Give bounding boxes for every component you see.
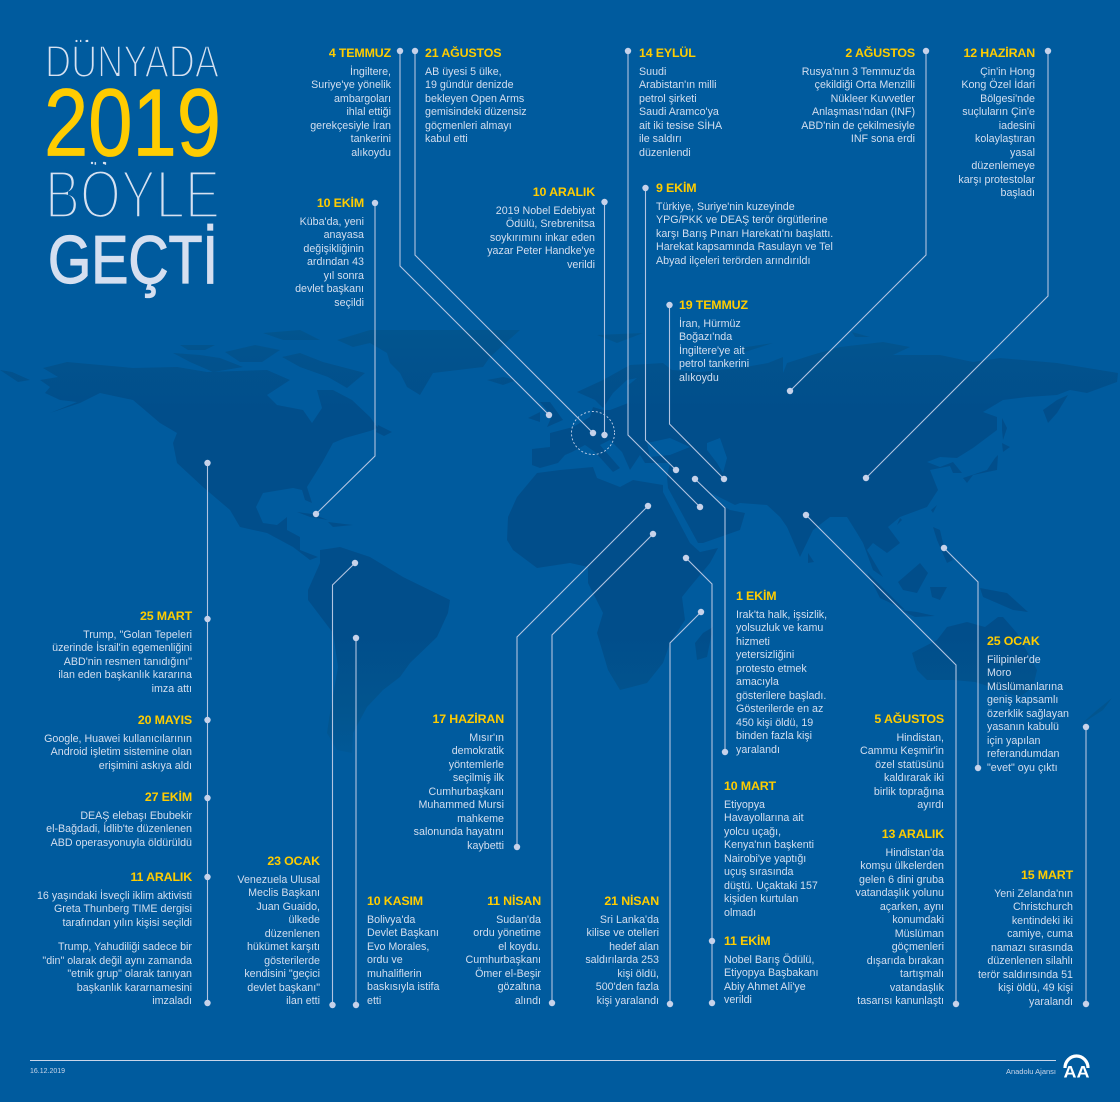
footer date: 16.12.2019 [30, 1068, 65, 1075]
panel: 13 Aralık: tartışmalı [900, 968, 944, 980]
panel: 23 Ocak [237, 854, 320, 1007]
panel: 1 Ekim: yolsuzluk ve kamu [736, 622, 823, 634]
panel: 10 Ekim Küba: ardından 43 [307, 256, 364, 268]
panel: 10 Ekim Küba: yıl sonra [324, 270, 364, 282]
Eurasia [532, 342, 1118, 577]
panel: 10 Mart: olmadı [724, 907, 756, 919]
panel: 1 Ekim: 1 EKİM [736, 589, 776, 603]
panel: 10 Ekim Küba: seçildi [334, 297, 364, 309]
connector: 9 Ekim [642, 185, 679, 473]
South America [308, 547, 450, 753]
panel: 12 Haziran: karşı protestolar [958, 174, 1035, 186]
connector: 17 Haziran [514, 503, 651, 850]
panel: 14 Eylül: Arabistan'ın milli [639, 79, 716, 91]
connector lines and dots [204, 48, 1089, 1008]
panel: 1 Ekim: binden fazla kişi [736, 730, 812, 742]
panel: 25 Ocak: özerklik sağlayan [987, 708, 1069, 720]
connector: 11 Nisan [549, 531, 656, 1006]
panel: 17 Haziran: Mısır'ın [469, 732, 504, 744]
panel: 10 Kasım: 10 KASIM [367, 894, 423, 908]
panel: 12 Haziran: yasal [1010, 147, 1035, 159]
panel: 13 Aralık: açarken, aynı [880, 901, 944, 913]
connector: 19 Temmuz [666, 302, 727, 482]
panel: 14 Eylül: düzenlendi [639, 147, 691, 159]
panel: 1 Ekim: Irak'ta halk, işsizlik, [736, 609, 827, 621]
panel: 25 Ocak: 25 OCAK [987, 634, 1040, 648]
panel: 15 Mart: kişi öldü, 49 kişi [998, 982, 1073, 994]
panel: 13 Aralık: Hindistan'da [886, 847, 944, 859]
panel: 27 Ekim: DEAŞ elebaşı Ebubekir [80, 810, 192, 822]
Australia and New Zealand [912, 617, 1112, 725]
dashed circle: Europe highlight [572, 412, 614, 454]
panel: 9 Ekim: 9 EKİM [656, 181, 696, 195]
panel: 20 Mayıs: 20 MAYIS [138, 713, 192, 727]
connector: 10 Aralık [601, 199, 608, 438]
panel: 27 Ekim: ABD operasyonuyla öldürüldü [51, 837, 192, 849]
panel: 5 Ağustos: Hindistan, [896, 732, 944, 744]
panel: 10 Kasım: ordu ve [367, 954, 403, 966]
connector: 2 Ağustos [787, 48, 929, 394]
panel: 10 Aralık [487, 185, 595, 271]
connector: 12 Haziran [863, 48, 1051, 481]
panel: 1 Ekim: hizmeti [736, 636, 770, 648]
panel: 10 Kasım: baskısıyla istifa [367, 981, 439, 993]
connector: ABD timeline [204, 460, 211, 1006]
panel: 25 Ocak [987, 634, 1069, 774]
panel: 23 Ocak: kendisini "geçici [244, 968, 320, 980]
panel: 25 Ocak: geniş kapsamlı [987, 694, 1058, 706]
panel: 15 Mart: Christchurch [1013, 901, 1073, 913]
panel: 2 Ağustos: Nükleer Kuvvetler [831, 93, 915, 105]
panel: 25 Mart: üzerinde İsrail'in egemenliğini [52, 642, 192, 654]
panel: 10 Mart: kişiden kurtulan [724, 893, 798, 905]
panel: 11 Aralık: 11 ARALIK [130, 870, 192, 884]
panel: 10 Ekim Küba [295, 196, 364, 309]
panel: 14 Eylül: Suudi [639, 66, 666, 78]
inland seas [610, 378, 727, 473]
Arctic islands [0, 330, 365, 388]
panel: 25 Ocak: Moro [987, 667, 1011, 679]
panel: 21 Ağustos: 19 gündür denizde [425, 79, 514, 91]
panel: 2 Ağustos: INF sona erdi [851, 133, 915, 145]
panel: 21 Nisan: 500'den fazla [596, 981, 659, 993]
connector: 10 Ekim Küba [313, 200, 378, 517]
title [44, 36, 221, 298]
panel: 21 Nisan: hedef alan [609, 941, 659, 953]
panel: 25 Ocak: "evet" oyu çıktı [987, 762, 1058, 774]
panel: 13 Aralık: 13 ARALIK [882, 827, 944, 841]
panel: 2 Ağustos: Rusya'nın 3 Temmuz'da [802, 66, 915, 78]
panel: 14 Eylül: 14 EYLÜL [639, 46, 696, 60]
panel: 11 Ekim: verildi [724, 994, 752, 1006]
panel: 1 Ekim: 450 kişi öldü, 19 [736, 717, 813, 729]
panel: 21 Ağustos: gemisindeki düzensiz [425, 106, 527, 118]
panel: 17 Haziran: mahkeme [457, 813, 504, 825]
panel: 5 Ağustos: özel statüsünü [875, 759, 944, 771]
panel: 14 Eylül: petrol şirketi [639, 93, 697, 105]
panel: 25 Mart: imza attı [152, 683, 192, 695]
connector: 10 Kasım [353, 635, 359, 1008]
panel: 20 Mayıs: Google, Huawei kullanıcılarının [44, 733, 192, 745]
panel: 17 Haziran: Muhammed Mursi [418, 799, 504, 811]
panel: 21 Nisan: saldırılarda 253 [585, 954, 659, 966]
panel: 15 Mart: terör saldırısında 51 [978, 969, 1073, 981]
panel: 27 Ekim [46, 790, 192, 849]
panel: 10 Ekim Küba: anayasa [324, 229, 364, 241]
panel: 2 Ağustos [801, 46, 915, 145]
panel: 11 Nisan: ordu yönetime [473, 927, 541, 939]
panel: 10 Ekim Küba: değişikliğinin [303, 243, 364, 255]
panel: 5 Ağustos: 5 AĞUSTOS [874, 712, 944, 726]
panel: 13 Aralık [855, 827, 944, 1007]
panel: 12 Haziran [958, 46, 1035, 199]
panel: 10 Mart: Kenya'nın başkenti [724, 839, 814, 851]
panel: 10 Kasım: Bolivya'da [367, 914, 415, 926]
title line: DÜNYADA: DÜNYADA [45, 36, 219, 87]
panel: 1 Ekim: gösterilere başladı. [736, 690, 826, 702]
panel: 15 Mart: namazı sırasında [991, 942, 1073, 954]
panel: 23 Ocak: Venezuela Ulusal [237, 874, 320, 886]
panel: 4 Temmuz: ihlal ettiği [346, 106, 391, 118]
Caribbean [297, 512, 353, 527]
panel: 21 Nisan [585, 894, 659, 1007]
panel: 13 Aralık: dışarıda bırakan [867, 955, 944, 967]
panel: 13 Aralık: Müslüman [895, 928, 944, 940]
connector: 1 Ekim [692, 476, 728, 755]
panel: 21 Ağustos [425, 46, 527, 145]
panel: 25 Mart: ilan eden başkanlık kararına [58, 669, 192, 681]
panel: 14 Eylül [639, 46, 722, 159]
panel: 10 Mart: yolcu uçağı, [724, 826, 781, 838]
panel: 1 Ekim [736, 589, 827, 756]
panel: 25 Ocak: Filipinler'de [987, 654, 1041, 666]
panel: 11 Nisan: Sudan'da [496, 914, 541, 926]
panel: 17 Haziran: Cumhurbaşkanı [429, 786, 504, 798]
panel: 10 Mart: düştü. Uçaktaki 157 [724, 880, 818, 892]
panel: 19 Temmuz: 19 TEMMUZ [679, 298, 748, 312]
panel: 4 Temmuz: alıkoydu [351, 147, 391, 159]
panel: 10 Aralık: yazar Peter Handke'ye [487, 245, 595, 257]
connector: 21 Nisan [667, 609, 704, 1007]
panel: 4 Temmuz: Suriye'ye yönelik [311, 79, 391, 91]
panel: 20 Mayıs: Android işletim sistemine olan [51, 746, 192, 758]
panel: 9 Ekim: karşı Barış Pınarı Harekatı'nı başlattı. [656, 228, 833, 240]
panel: 17 Haziran: 17 HAZİRAN [433, 712, 504, 726]
panel: 27 Ekim: el-Bağdadi, İdlib'te düzenlenen [46, 823, 192, 835]
Newfoundland [376, 425, 392, 436]
panel: 23 Ocak: 23 OCAK [267, 854, 320, 868]
panel: 11 Nisan: 11 NİSAN [487, 894, 541, 908]
panel: 10 Mart: uçuş sırasında [724, 866, 794, 878]
panel: 15 Mart: düzenlenen silahlı [987, 955, 1073, 967]
Southeast Asia islands [808, 505, 1028, 617]
panel: 10 Aralık: Ödülü, Srebrenitsa [506, 218, 595, 230]
panel: 17 Haziran [414, 712, 504, 852]
panel: 4 Temmuz: 4 TEMMUZ [329, 46, 391, 60]
panel: 4 Temmuz: gerekçesiyle İran [310, 120, 391, 132]
panel: 21 Nisan: kişi yaralandı [597, 995, 659, 1007]
panel: 2 Ağustos: ABD'nin de çekilmesiyle [801, 120, 915, 132]
panel: 11 Ekim: Nobel Barış Ödülü, [724, 954, 814, 966]
panel: 11 Aralık: "etnik grup" olarak tanıyan [67, 968, 192, 980]
panel: 5 Ağustos: ayırdı [917, 799, 944, 811]
panel: 9 Ekim [656, 181, 833, 267]
panel: 12 Haziran: başladı [1001, 187, 1035, 199]
panel: 19 Temmuz: Boğazı'nda [679, 331, 732, 343]
panel: 15 Mart: Yeni Zelanda'nın [994, 888, 1073, 900]
panel: 23 Ocak: düzenlenen [265, 928, 320, 940]
panel: 15 Mart: camiye, cuma [1007, 928, 1073, 940]
panel: 11 Aralık: Trump, Yahudiliği sadece bir [58, 941, 192, 953]
panel: 11 Ekim: Etiyopya Başbakanı [724, 967, 818, 979]
panel: 17 Haziran: kaybetti [467, 840, 504, 852]
panel: 2 Ağustos: Anlaşması'ndan (INF) [812, 106, 915, 118]
panel: 10 Mart: Nairobi'ye yaptığı [724, 853, 806, 865]
panel: 19 Temmuz: İran, Hürmüz [679, 318, 741, 330]
panel: 10 Ekim Küba: 10 EKİM [317, 196, 364, 210]
panel: 11 Aralık: imzaladı [152, 995, 192, 1007]
panel: 20 Mayıs: erişimini askıya aldı [99, 760, 192, 772]
panel: 21 Ağustos: kabul etti [425, 133, 468, 145]
panel: 25 Ocak: referandumdan [987, 748, 1060, 760]
panel: 1 Ekim: Gösterilerde en az [736, 703, 823, 715]
panel: 25 Mart: Trump, "Golan Tepeleri [83, 629, 192, 641]
panel: 10 Kasım: muhaliflerin [367, 968, 422, 980]
panel: 9 Ekim: Türkiye, Suriye'nin kuzeyinde [656, 201, 795, 213]
panel: 13 Aralık: komşu ülkelerden [860, 860, 944, 872]
panel: 21 Nisan: 21 NİSAN [604, 894, 659, 908]
panel: 15 Mart: yaralandı [1029, 996, 1073, 1008]
panel: 23 Ocak: Juan Guaido, [256, 901, 320, 913]
panel: 1 Ekim: yetersizliğini [736, 649, 794, 661]
panel: 14 Eylül: Saudi Aramco'ya [639, 106, 719, 118]
panel: 17 Haziran: salonunda hayatını [414, 826, 504, 838]
panel: 10 Aralık: 2019 Nobel Edebiyat [496, 205, 595, 217]
East Asian islands [963, 395, 1068, 483]
panel: 19 Temmuz: İngiltere'ye ait [679, 345, 745, 357]
title line: 2019: 2019 [44, 70, 221, 176]
panel: 11 Ekim: 11 EKİM [724, 934, 770, 948]
footer source: Anadolu Ajansı [1006, 1067, 1056, 1076]
panel: 25 Mart: 25 MART [140, 609, 192, 623]
panel: 21 Nisan: kişi öldü, [617, 968, 659, 980]
panel: 10 Aralık: 10 ARALIK [533, 185, 595, 199]
panel: 1 Ekim: amacıyla [736, 676, 779, 688]
panel: 13 Aralık: vatandaşlık yolunu [855, 887, 944, 899]
panel: 11 Nisan: gözaltına [498, 981, 541, 993]
panel: 1 Ekim: protesto etmek [736, 663, 807, 675]
panel: 11 Aralık: tarafından yılın kişisi seçildi [62, 917, 192, 929]
footer rule [30, 1060, 1056, 1062]
panel: 12 Haziran: Çin'in Hong [980, 66, 1035, 78]
connector: 25 Ocak [941, 545, 981, 771]
panel: 4 Temmuz [310, 46, 391, 159]
panel: 21 Nisan: kilise ve otelleri [587, 927, 659, 939]
panel: 21 Ağustos: bekleyen Open Arms [425, 93, 524, 105]
connector: 15 Mart [1083, 724, 1089, 1007]
panel: 25 Ocak: Müslümanlarına [987, 681, 1063, 693]
UK and Ireland [528, 402, 563, 427]
panel: 10 Aralık: verildi [567, 259, 595, 271]
panel: 12 Haziran: suçluların Çin'e [962, 106, 1035, 118]
panel: 10 Mart [724, 779, 818, 919]
connector: 23 Ocak [329, 560, 358, 1008]
panel: 9 Ekim: YPG/PKK ve DEAŞ terör örgütlerine [656, 214, 828, 226]
panel: 10 Kasım: Devlet Başkanı [367, 927, 439, 939]
panel: 11 Ekim [724, 934, 818, 1006]
panel: 20 Mayıs [44, 713, 192, 772]
panel: 10 Ekim Küba: Küba'da, yeni [300, 216, 364, 228]
panel: 11 Aralık: Greta Thunberg TIME dergisi [54, 903, 192, 915]
connector: 5 Ağustos [803, 512, 959, 1007]
panel: 10 Mart: Etiyopya [724, 799, 765, 811]
panel: 13 Aralık: göçmenleri [892, 941, 944, 953]
panel: 9 Ekim: Abyad ilçeleri terörden arındırıldı [656, 255, 810, 267]
panel: 23 Ocak: Meclis Başkanı [248, 887, 320, 899]
panel: 21 Nisan: Sri Lanka'da [600, 914, 659, 926]
panel: 12 Haziran: Bölgesi'nde [980, 93, 1035, 105]
panel: 9 Ekim: Harekat kapsamında Rasulayn ve Tel [656, 241, 833, 253]
panel: 17 Haziran: demokratik [452, 745, 504, 757]
North America [40, 362, 378, 560]
panel: 23 Ocak: ülkede [288, 914, 320, 926]
panel: 17 Haziran: seçilmiş ilk [453, 772, 504, 784]
Arctic Eurasia islands [597, 332, 870, 352]
Madagascar [695, 627, 713, 660]
panel: 23 Ocak: hükümet karşıtı [247, 941, 320, 953]
panel: 23 Ocak: ilan etti [286, 995, 320, 1007]
panel: 10 Kasım: Evo Morales, [367, 941, 429, 953]
panel: 21 Ağustos: AB üyesi 5 ülke, [425, 66, 502, 78]
panel: 15 Mart [978, 868, 1074, 1008]
panel: 25 Ocak: için yapılan [987, 735, 1040, 747]
panel: 12 Haziran: düzenlemeye [971, 160, 1035, 172]
panel: 10 Mart: Havayollarına ait [724, 812, 804, 824]
panel: 12 Haziran: 12 HAZİRAN [964, 46, 1035, 60]
panel: 11 Nisan: alındı [515, 995, 541, 1007]
panel: 4 Temmuz: tankerini [351, 133, 391, 145]
panel: 11 Aralık [37, 870, 192, 1007]
panel: 11 Aralık: 16 yaşındaki İsveçli iklim aktivisti [37, 890, 192, 902]
panel: 19 Temmuz: petrol tankerini [679, 358, 749, 370]
panel: 11 Nisan [466, 894, 541, 1007]
Iceland [487, 377, 517, 385]
panel: 5 Ağustos: Cammu Keşmir'in [860, 745, 944, 757]
panel: 10 Mart: 10 MART [724, 779, 776, 793]
panel: 10 Ekim Küba: devlet başkanı [295, 283, 364, 295]
panel: 25 Ocak: yasanın kabulü [987, 721, 1059, 733]
connector: 4 Temmuz [397, 48, 552, 418]
world map [0, 330, 1118, 753]
connector: 21 Ağustos [412, 48, 596, 436]
panel: 12 Haziran: iadesini [999, 120, 1035, 132]
panel: 21 Ağustos: 21 AĞUSTOS [425, 46, 501, 60]
title line: BÖYLE: BÖYLE [45, 156, 220, 233]
panel: 14 Eylül: ait iki tesise SİHA [639, 120, 722, 132]
panel: 13 Aralık: gelen 6 dini gruba [859, 874, 944, 886]
panel: 1 Ekim: yaralandı [736, 744, 780, 756]
panel: 11 Nisan: Cumhurbaşkanı [466, 954, 541, 966]
panel: 15 Mart: 15 MART [1021, 868, 1073, 882]
panel: 5 Ağustos: birlik toprağına [874, 786, 944, 798]
panel: 4 Temmuz: ambargoları [334, 93, 391, 105]
panel: 25 Mart: ABD'nin resmen tanıdığını" [64, 656, 192, 668]
panel: 13 Aralık: tasarısı kanunlaştı [857, 995, 944, 1007]
connector: 14 Eylül [625, 48, 703, 510]
panel: 11 Nisan: Ömer el-Beşir [475, 968, 541, 980]
panel: 25 Mart [52, 609, 192, 695]
connector: 10 Mart [683, 555, 715, 1006]
panel: 2 Ağustos: 2 AĞUSTOS [845, 46, 915, 60]
panel: 13 Aralık: konumdaki [892, 914, 944, 926]
panel: 11 Nisan: el koydu. [498, 941, 541, 953]
panel: 12 Haziran: Kong Özel İdari [961, 79, 1035, 91]
panel: 5 Ağustos [860, 712, 944, 811]
panel: 11 Aralık: "din" olarak değil aynı zamanda [42, 955, 192, 967]
panel: 23 Ocak: devlet başkanı" [247, 982, 320, 994]
panel: 11 Ekim: Abiy Ahmet Ali'ye [724, 981, 806, 993]
Africa [507, 467, 718, 690]
panel: 17 Haziran: yöntemlerle [449, 759, 504, 771]
panel: 10 Kasım: etti [367, 995, 381, 1007]
panel: 19 Temmuz [679, 298, 749, 384]
panel: 4 Temmuz: İngiltere, [350, 66, 391, 78]
panel: 12 Haziran: kolaylaştıran [975, 133, 1035, 145]
panel: 11 Aralık: başkanlık kararnamesini [77, 982, 192, 994]
icon: Anadolu Ajansı logo: AA [1064, 1062, 1090, 1082]
panel: 27 Ekim: 27 EKİM [145, 790, 192, 804]
panel: 2 Ağustos: çekildiği Orta Menzilli [815, 79, 915, 91]
panel: 19 Temmuz: alıkoydu [679, 372, 719, 384]
panel: 23 Ocak: gösterilerde [264, 955, 320, 967]
title line: GEÇTİ: GEÇTİ [48, 222, 218, 298]
panel: 10 Aralık: soykırımını inkar eden [490, 232, 595, 244]
panel: 5 Ağustos: kaldırarak iki [884, 772, 944, 784]
panel: 21 Ağustos: göçmenleri almayı [425, 120, 512, 132]
panel: 13 Aralık: vatandaşlık [890, 982, 944, 994]
Greenland [337, 330, 520, 395]
panel: 14 Eylül: ile saldırı [639, 133, 682, 145]
panel: 15 Mart: kentindeki iki [1012, 915, 1073, 927]
panel: 10 Kasım [367, 894, 440, 1007]
